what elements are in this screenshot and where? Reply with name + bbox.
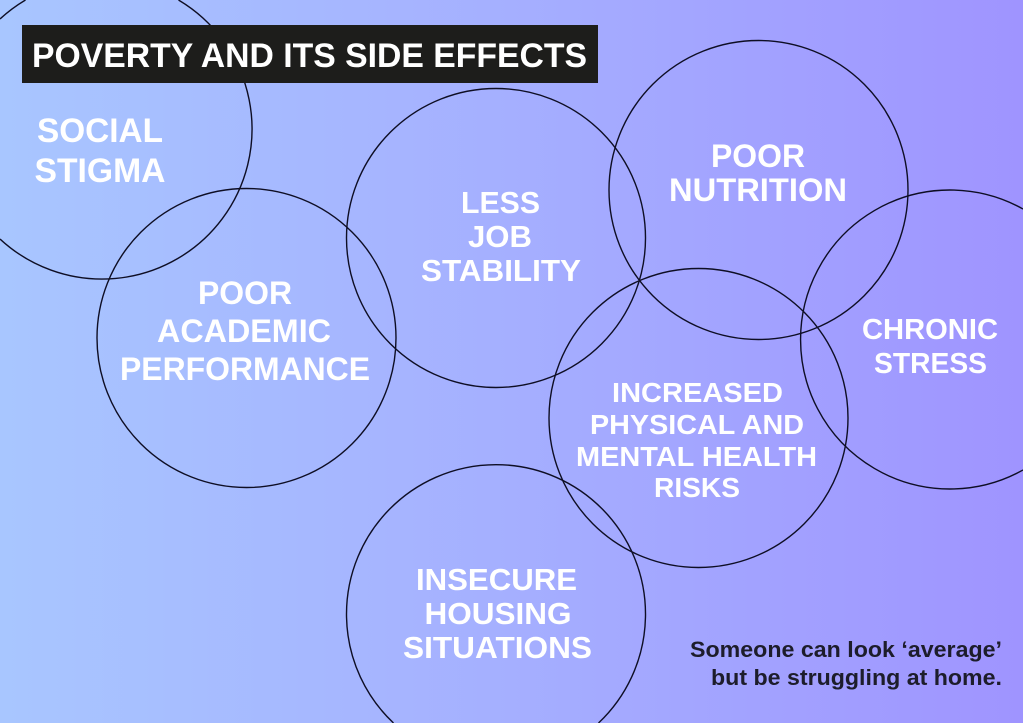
- footnote: Someone can look ‘average’: [690, 637, 1002, 662]
- label: increased physical and mental health risks: PHYSICAL AND: [590, 409, 804, 440]
- label: chronic stress: [862, 314, 998, 380]
- label: poor academic performance: ACADEMIC: [157, 313, 331, 349]
- label: less job stability: LESS: [461, 185, 540, 220]
- label: poor nutrition: NUTRITION: [669, 172, 847, 208]
- label: poor academic performance: POOR: [198, 275, 292, 311]
- label: increased physical and mental health risks: MENTAL HEALTH: [576, 441, 817, 472]
- label: insecure housing situations: SITUATIONS: [403, 630, 592, 665]
- label: chronic stress: STRESS: [874, 348, 987, 380]
- label: insecure housing situations: INSECURE: [416, 562, 577, 597]
- label: chronic stress: CHRONIC: [862, 314, 998, 346]
- label: social stigma: [34, 112, 166, 190]
- label: poor academic performance: PERFORMANCE: [120, 351, 370, 387]
- footnote: [690, 637, 1002, 690]
- label: social stigma: SOCIAL: [37, 112, 163, 150]
- label: poor academic performance: [120, 275, 370, 387]
- label: poor nutrition: [669, 138, 847, 208]
- footnote: but be struggling at home.: [711, 665, 1002, 690]
- label: increased physical and mental health risks: [576, 377, 817, 503]
- label: less job stability: [421, 185, 581, 288]
- label: insecure housing situations: [403, 562, 592, 665]
- label: poor nutrition: POOR: [711, 138, 805, 174]
- label: increased physical and mental health risks: INCREASED: [612, 377, 783, 408]
- label: increased physical and mental health risks: RISKS: [654, 472, 740, 503]
- label: less job stability: STABILITY: [421, 253, 581, 288]
- label: social stigma: STIGMA: [34, 152, 166, 190]
- title: [22, 25, 598, 83]
- label: less job stability: JOB: [468, 219, 532, 254]
- label: insecure housing situations: HOUSING: [424, 596, 572, 631]
- title: POVERTY AND ITS SIDE EFFECTS: [32, 37, 587, 75]
